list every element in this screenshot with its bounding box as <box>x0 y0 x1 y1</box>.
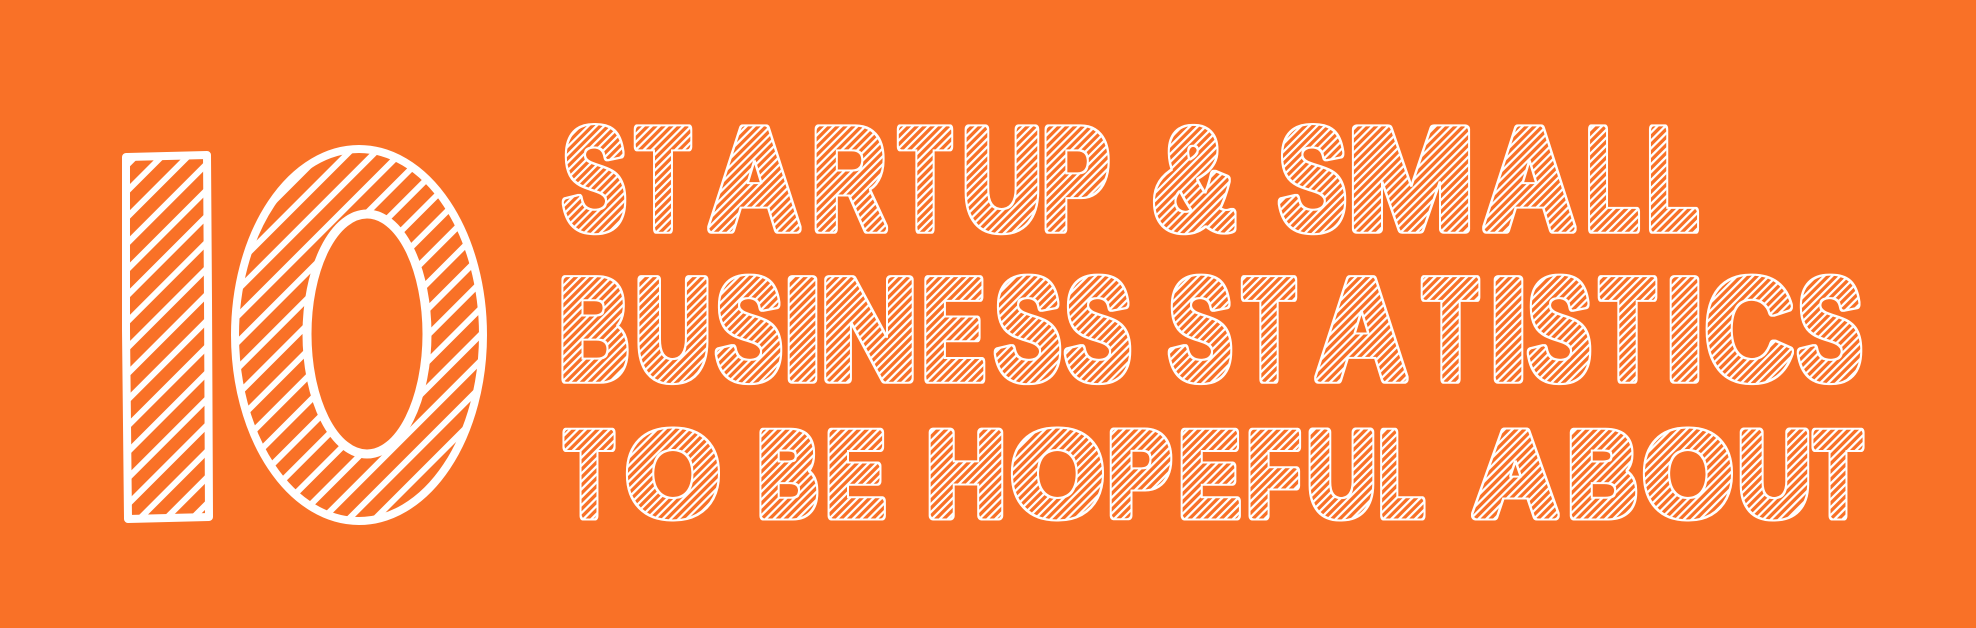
title line 1: S <box>1279 100 1346 259</box>
title line 2: U <box>636 250 710 409</box>
title line 1: P <box>1042 100 1109 259</box>
title line 3: B <box>758 408 818 541</box>
banner background and artwork <box>122 123 1865 525</box>
title line 2: S <box>1065 250 1131 409</box>
title line 1: L <box>1586 100 1639 259</box>
title line 3 <box>566 408 1862 541</box>
title line 1: U <box>962 100 1042 259</box>
title line 1: & <box>1152 100 1236 259</box>
title line 3: A <box>1474 408 1558 541</box>
title line 3: E <box>826 408 885 541</box>
title line 1: S <box>563 100 626 259</box>
title line 2: I <box>1490 250 1527 409</box>
big number 10 <box>122 145 487 525</box>
title line 3: T <box>566 408 612 541</box>
title line 2: S <box>995 250 1061 409</box>
title line 1 <box>563 100 1698 259</box>
title line 3: E <box>1179 408 1240 541</box>
title line 2: B <box>559 250 629 409</box>
title line 3: T <box>1814 408 1862 541</box>
title line 1: A <box>1484 100 1575 259</box>
title line 2: E <box>922 250 985 409</box>
title line 2: S <box>1169 250 1232 409</box>
title line 2: C <box>1706 250 1792 409</box>
title line 2: I <box>784 250 821 409</box>
title line 1: L <box>1647 100 1698 259</box>
title line 2: I <box>1666 250 1703 409</box>
title line 1: M <box>1348 100 1474 259</box>
title line 3: L <box>1379 408 1424 541</box>
title line 3: F <box>1247 408 1300 541</box>
title line 2: T <box>1244 250 1294 409</box>
title line 3: P <box>1108 408 1171 541</box>
title line 3: U <box>1738 408 1810 541</box>
title line 2: A <box>1316 250 1407 409</box>
title line 3: O <box>626 408 720 541</box>
title line 2 <box>559 250 1862 409</box>
title <box>559 100 1862 541</box>
title line 3: B <box>1568 408 1637 541</box>
title line 3: O <box>1012 408 1104 541</box>
numeral 0 drawn as a hatched ring <box>231 145 487 525</box>
title line 2: S <box>1528 250 1591 409</box>
numeral 0 drawn as a hatched ring: 0 <box>214 53 500 628</box>
title line 1: R <box>812 100 886 259</box>
title line 2: T <box>1600 250 1654 409</box>
title line 2: S <box>716 250 782 409</box>
title line 2: N <box>820 250 918 409</box>
numeral 1 drawn as a hatched bar: 1 <box>85 198 252 534</box>
title line 2: T <box>1424 250 1478 409</box>
title line 1: T <box>900 100 950 259</box>
title line 2: S <box>1798 250 1862 409</box>
title line 3: O <box>1644 408 1732 541</box>
numeral 1 drawn as a hatched bar <box>122 151 213 523</box>
title line 3: H <box>926 408 1006 541</box>
title line 3: U <box>1308 408 1376 541</box>
title line 1: T <box>636 100 690 259</box>
title line 1: A <box>709 100 800 259</box>
